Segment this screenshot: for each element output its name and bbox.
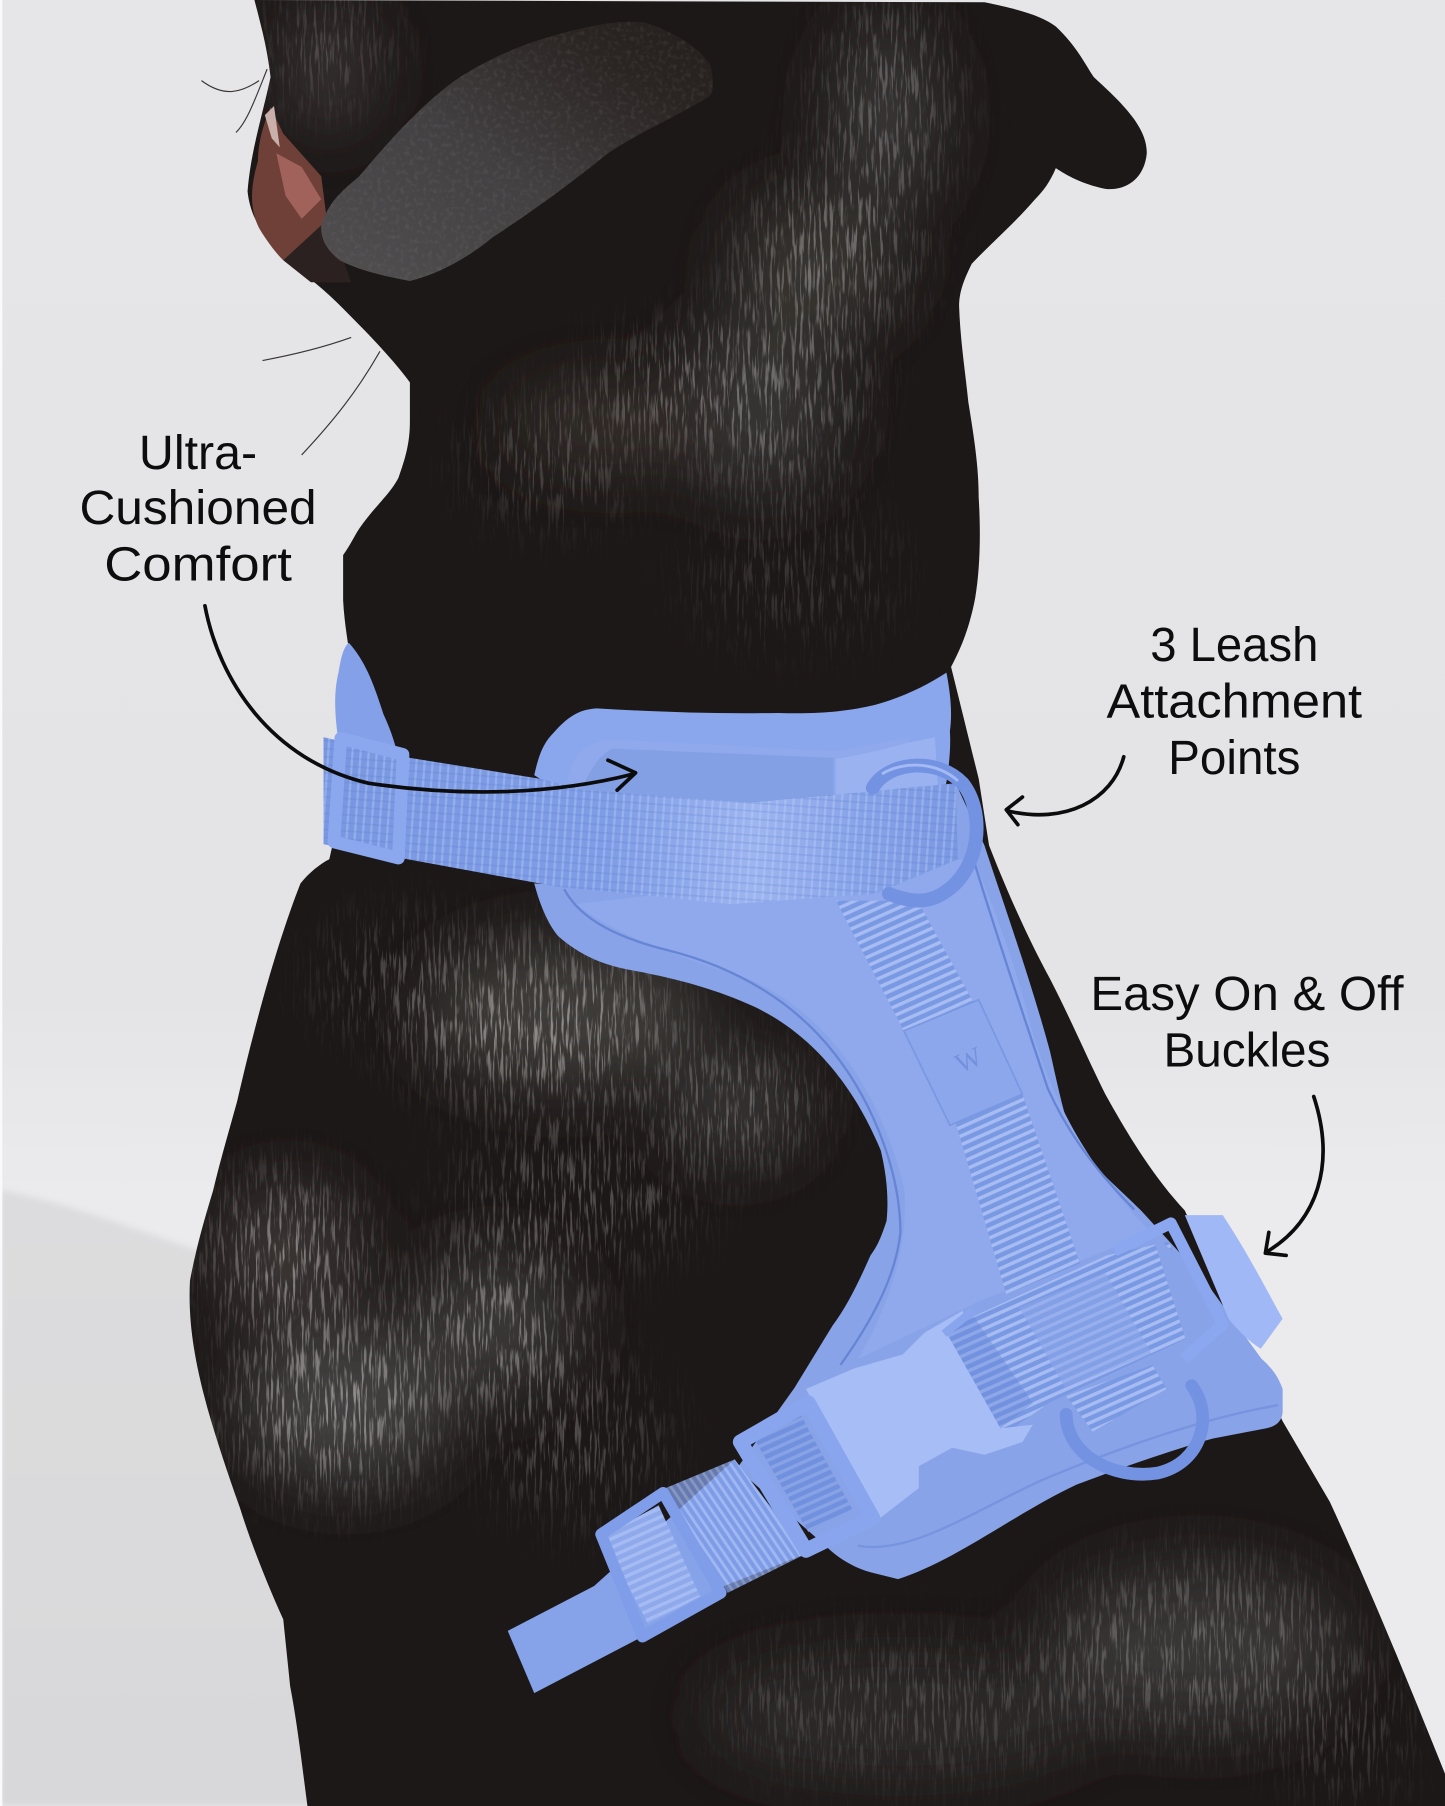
callout: Ultra-Cushioned Comfort: Ultra- — [139, 426, 257, 480]
rear padding — [335, 643, 400, 766]
logo tab — [904, 1000, 1022, 1125]
panel stitching — [564, 858, 1278, 1547]
lower D-ring — [1066, 1386, 1203, 1474]
callout: Ultra-Cushioned Comfort: Comfort — [104, 537, 292, 592]
callout: 3 Leash Attachment Points: 3 Leash — [1150, 618, 1318, 672]
left slider buckle — [334, 738, 403, 858]
vertical webbing strap — [836, 901, 1080, 1295]
callout: 3 Leash Attachment Points: Points — [1168, 731, 1300, 785]
callout: 3 Leash Attachment Points — [1006, 618, 1363, 825]
neoprene back panel — [534, 783, 1283, 1579]
front padding outer — [534, 673, 951, 795]
dog ear — [321, 22, 713, 281]
callout: Easy On & Off Buckles: Buckles — [1163, 1024, 1330, 1078]
callout: Ultra-Cushioned Comfort: Cushioned — [79, 481, 317, 535]
dog soft shading — [219, 6, 1347, 1774]
arrow: to neck padding — [205, 606, 636, 792]
panel light inner — [576, 858, 1151, 1359]
callout: 3 Leash Attachment Points: Attachment — [1106, 675, 1363, 729]
back webbing strap — [968, 1242, 1207, 1428]
collar D-ring — [873, 766, 977, 901]
small slider — [601, 1493, 721, 1637]
padding inner stitching band — [568, 737, 910, 795]
chest strap tail — [508, 1459, 806, 1693]
buckle main — [740, 1311, 1033, 1550]
collar strap — [324, 737, 958, 904]
arrow: to D-ring — [1006, 757, 1124, 825]
callout: Ultra-Cushioned Comfort — [79, 426, 636, 792]
whiskers — [201, 69, 380, 455]
neck padding and collar — [324, 643, 977, 904]
right buckle — [1115, 1215, 1283, 1376]
mesh panel — [836, 737, 938, 800]
dog mouth — [252, 107, 328, 260]
small strap to lower D-ring — [1066, 1365, 1166, 1432]
callout: Easy On & Off Buckles: Easy On & Off — [1090, 967, 1404, 1021]
harness body panel — [534, 783, 1283, 1579]
callout: Easy On & Off Buckles — [1090, 967, 1404, 1255]
lower straps and buckles — [508, 1215, 1283, 1693]
padding inner patch — [581, 749, 834, 806]
logo tab: W — [950, 1040, 987, 1079]
arrow: to buckle — [1265, 1096, 1323, 1255]
